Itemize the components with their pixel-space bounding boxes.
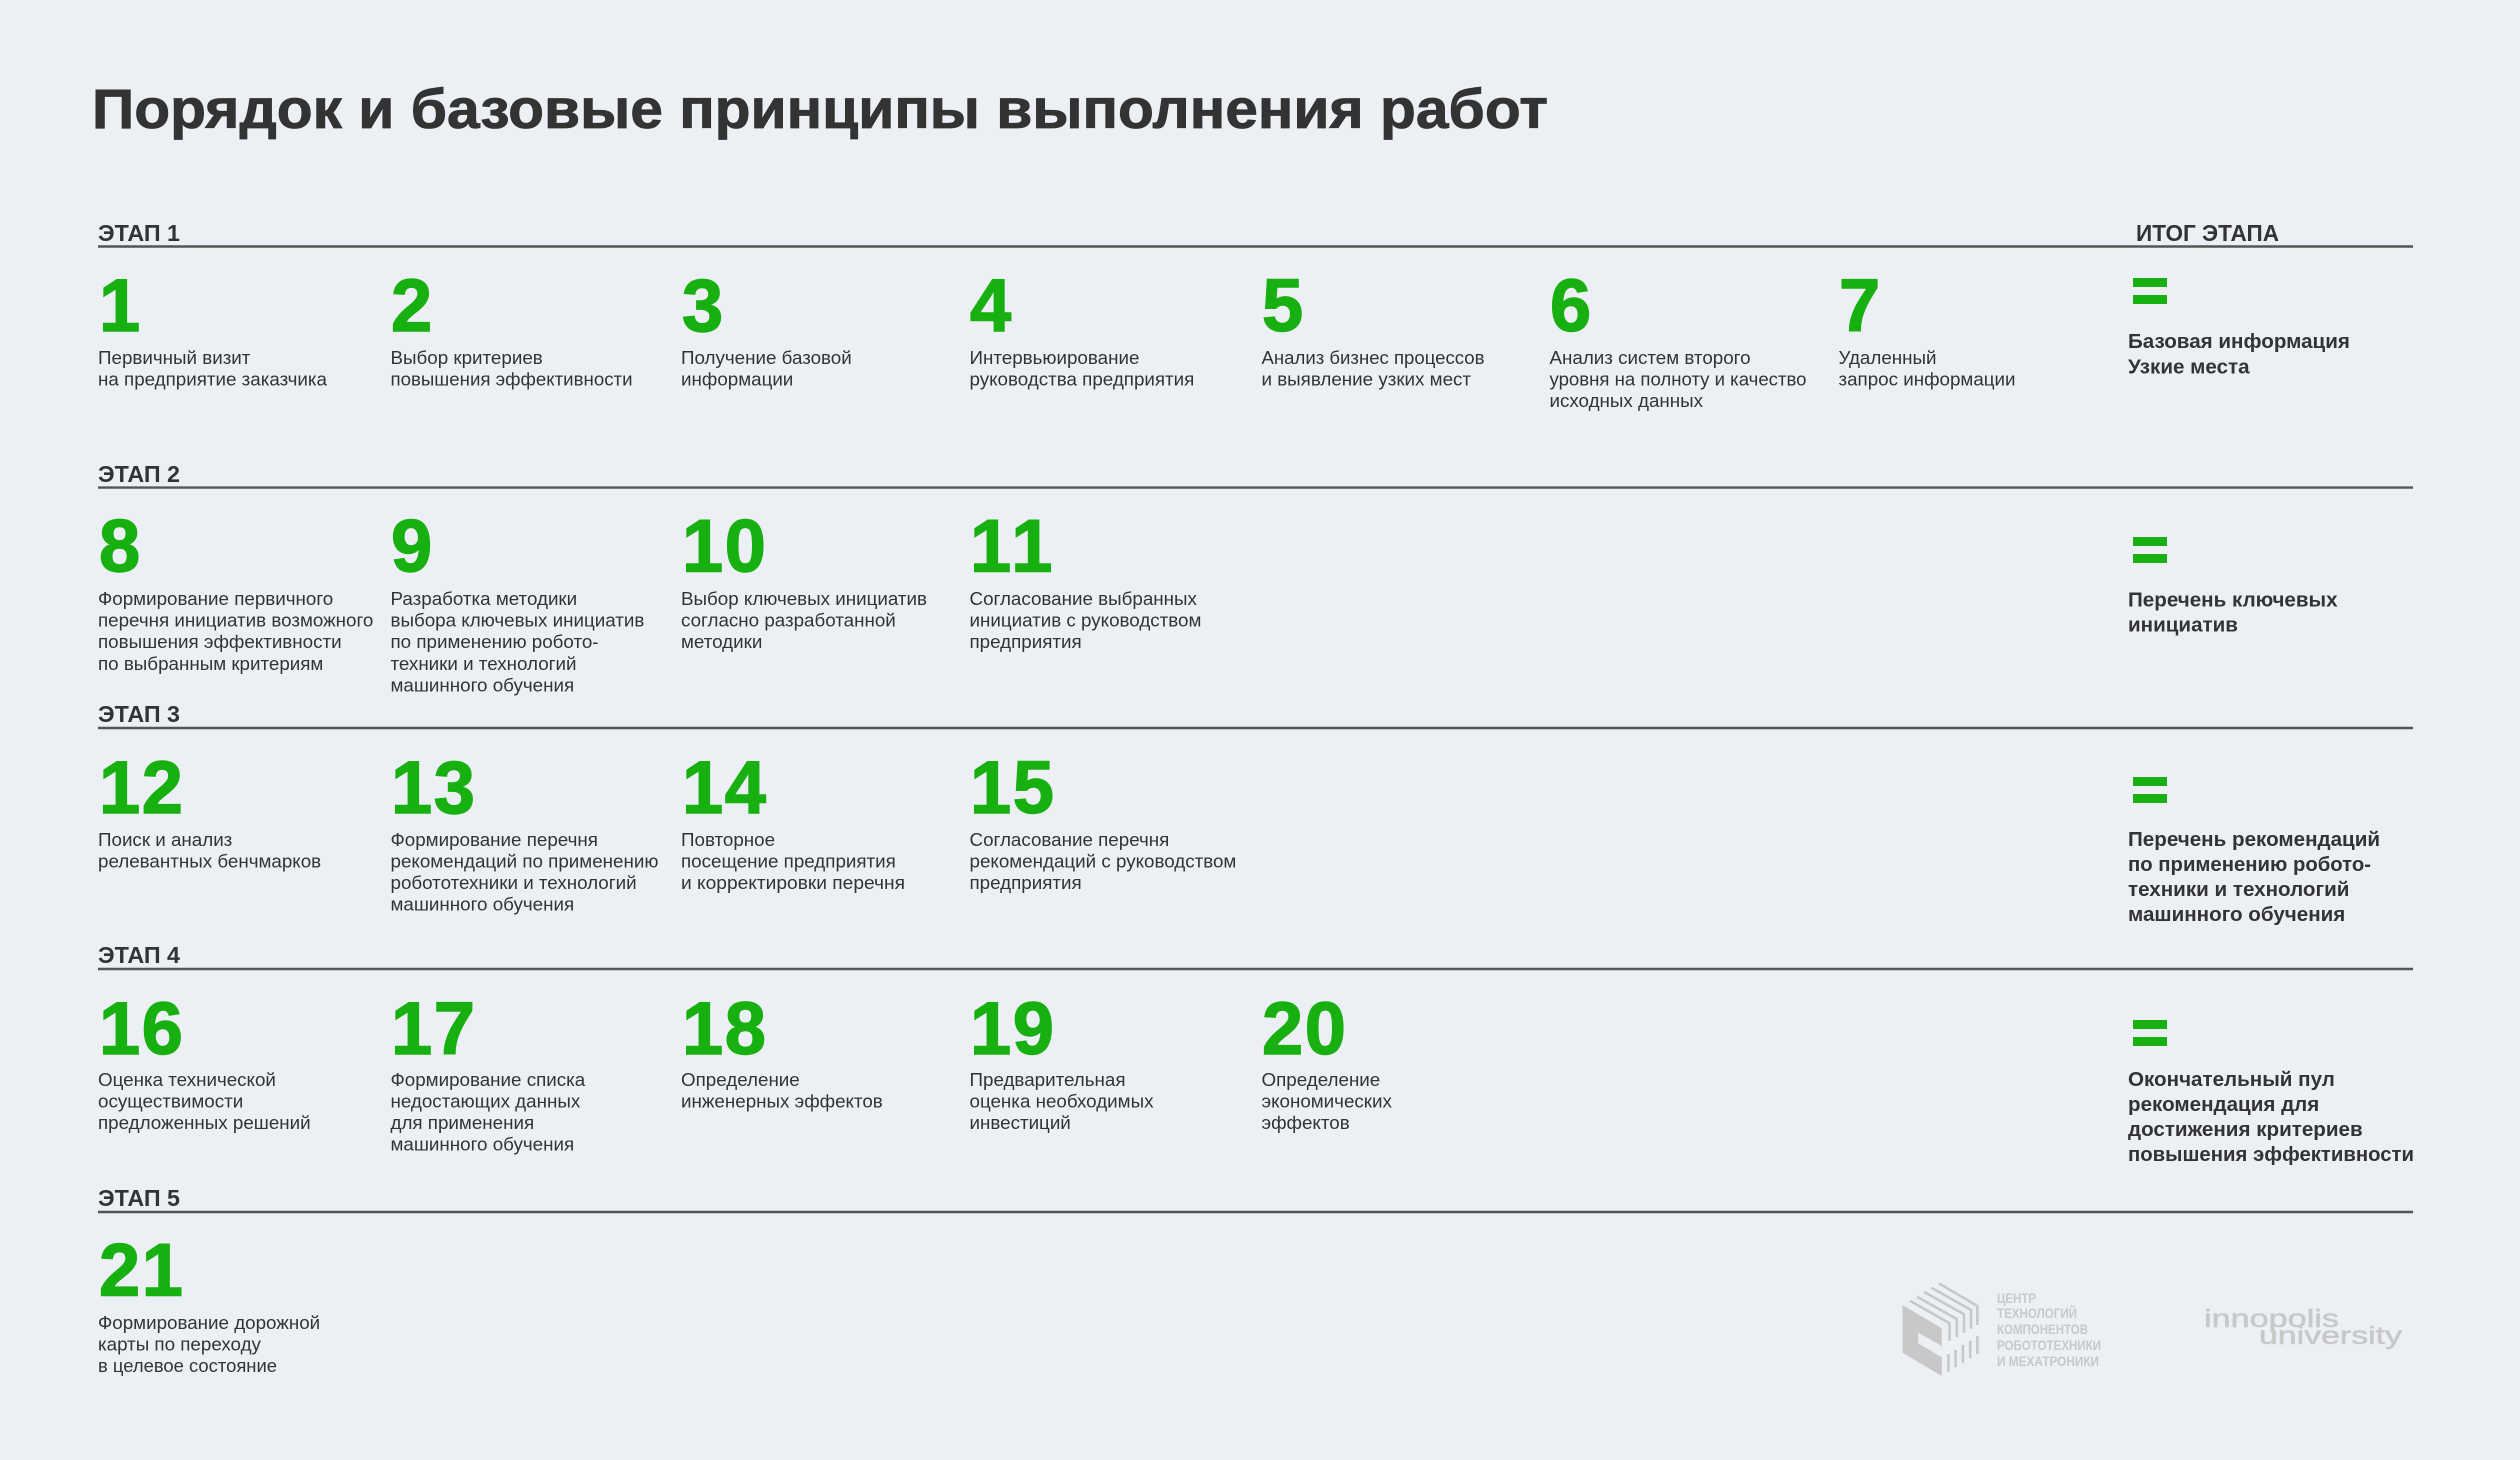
step 18	[681, 987, 883, 1112]
step 9	[390, 504, 644, 695]
step 19	[970, 987, 1154, 1133]
step 12: 12	[99, 746, 185, 829]
step 16: 16	[99, 987, 185, 1070]
step 21: карты по переходу	[98, 1334, 262, 1354]
result 4: повышения эффективности	[2128, 1143, 2414, 1166]
step 5: и выявление узких мест	[1262, 368, 1471, 390]
step 19: инвестиций	[970, 1112, 1071, 1133]
result 4: рекомендация для	[2128, 1093, 2319, 1116]
step 19: 19	[970, 987, 1056, 1070]
step 13: 13	[391, 746, 477, 829]
step 4: руководства предприятия	[970, 368, 1194, 390]
panel: stage 5	[98, 1185, 2413, 1376]
step 15: Согласование перечня	[970, 829, 1169, 850]
step 12	[98, 746, 321, 872]
step 5	[1262, 264, 1485, 390]
step 15: предприятия	[970, 872, 1082, 893]
result 1: Базовая информация	[2128, 330, 2350, 353]
step 8: по выбранным критериям	[98, 653, 323, 674]
panel: stage 3	[98, 701, 2413, 926]
step 21: Формирование дорожной	[98, 1312, 320, 1333]
result 3: по применению робото-	[2128, 853, 2371, 876]
step 1	[98, 264, 327, 390]
step 9: техники и технологий	[390, 653, 576, 674]
step 9: 9	[391, 504, 434, 588]
step 17: 17	[391, 987, 477, 1070]
logo: innopolis university	[2204, 1305, 2403, 1350]
result 3: техники и технологий	[2128, 878, 2349, 901]
step 6: 6	[1550, 264, 1593, 347]
step 2: повышения эффективности	[390, 368, 632, 390]
step 12: релевантных бенчмарков	[98, 850, 321, 872]
step 13: Формирование перечня	[390, 829, 598, 850]
result 3: Перечень рекомендаций	[2128, 828, 2380, 851]
step 14: Повторное	[681, 829, 775, 850]
heading: stage 3: ЭТАП 3	[98, 701, 180, 727]
step 20: Определение	[1262, 1069, 1380, 1090]
step 16	[98, 987, 311, 1133]
step 20: экономических	[1262, 1090, 1393, 1112]
step 7: 7	[1839, 264, 1882, 347]
step 13: робототехники и технологий	[390, 872, 637, 893]
logo text: ТЕХНОЛОГИЙ	[1997, 1306, 2077, 1321]
step 20	[1262, 987, 1393, 1133]
step 10	[681, 504, 927, 652]
step 8: 8	[99, 504, 142, 588]
logo text	[1997, 1291, 2101, 1369]
step 17: машинного обучения	[390, 1134, 574, 1154]
logo text: ЦЕНТР	[1997, 1291, 2036, 1306]
step 3	[681, 264, 852, 390]
heading: stage 4: ЭТАП 4	[98, 942, 180, 968]
step 2	[390, 264, 632, 390]
heading: stage 5: ЭТАП 5	[98, 1185, 180, 1211]
step 18: инженерных эффектов	[681, 1090, 883, 1112]
step 9: Разработка методики	[390, 588, 577, 609]
step 9: по применению робото-	[390, 631, 599, 652]
step 17	[390, 987, 586, 1154]
step 18: Определение	[681, 1069, 800, 1090]
step 13: машинного обучения	[390, 894, 574, 914]
logo: innopolis university: university	[2259, 1322, 2403, 1350]
step 15: 15	[970, 746, 1056, 829]
step 7: Удаленный	[1838, 347, 1937, 368]
step 7: запрос информации	[1838, 368, 2016, 390]
result 2	[2128, 537, 2338, 636]
step 10: 10	[682, 504, 768, 588]
step 14	[681, 746, 905, 893]
result 4: достижения критериев	[2128, 1118, 2363, 1141]
step 6: исходных данных	[1550, 390, 1704, 411]
step 21: в целевое состояние	[98, 1355, 277, 1376]
step 8: Формирование первичного	[98, 588, 333, 609]
step 1: 1	[99, 264, 142, 347]
step 10: Выбор ключевых инициатив	[681, 588, 927, 609]
result 4: Окончательный пул	[2128, 1068, 2335, 1091]
step 19: оценка необходимых	[970, 1090, 1154, 1112]
logo: robotics center	[1902, 1283, 2101, 1376]
step 8	[98, 504, 373, 674]
step 19: Предварительная	[970, 1069, 1126, 1090]
step 21: 21	[99, 1228, 185, 1312]
step 17: Формирование списка	[390, 1069, 586, 1090]
step 8: перечня инициатив возможного	[98, 610, 373, 631]
step 13	[390, 746, 658, 914]
step 3: 3	[682, 264, 725, 347]
step 11: 11	[970, 504, 1054, 588]
result 3	[2128, 777, 2380, 926]
panel: stage 4	[98, 942, 2414, 1166]
step 4: 4	[970, 264, 1013, 347]
heading: stage 1: ЭТАП 1	[98, 220, 180, 246]
step 6	[1550, 264, 1806, 411]
panel: stage 1	[98, 220, 2413, 411]
step 11: инициатив с руководством	[970, 610, 1201, 631]
heading: stage 2: ЭТАП 2	[98, 461, 180, 487]
step 21	[98, 1228, 320, 1376]
step 16: осуществимости	[98, 1090, 243, 1112]
step 11: предприятия	[970, 631, 1082, 652]
logo: innopolis university: innopolis	[2204, 1305, 2339, 1333]
step 20: эффектов	[1262, 1112, 1350, 1133]
step 3: информации	[681, 368, 793, 390]
step 15	[970, 746, 1236, 893]
step 15: рекомендаций с руководством	[970, 850, 1236, 872]
logo text: КОМПОНЕНТОВ	[1997, 1322, 2088, 1337]
step 10: согласно разработанной	[681, 610, 896, 631]
heading: stage result: ИТОГ ЭТАПА	[2136, 220, 2279, 246]
step 13: рекомендаций по применению	[390, 850, 658, 872]
result 1	[2128, 278, 2350, 378]
step 17: недостающих данных	[390, 1090, 581, 1112]
step 20: 20	[1262, 987, 1348, 1070]
step 14: посещение предприятия	[681, 850, 896, 872]
step 17: для применения	[390, 1112, 534, 1133]
step 3: Получение базовой	[681, 347, 852, 368]
step 16: предложенных решений	[98, 1112, 311, 1133]
step 6: Анализ систем второго	[1550, 347, 1751, 368]
title: Порядок и базовые принципы выполнения работ	[92, 77, 1548, 140]
step 9: выбора ключевых инициатив	[390, 610, 644, 631]
result 3: машинного обучения	[2128, 903, 2345, 926]
step 2: Выбор критериев	[390, 347, 543, 368]
step 5: Анализ бизнес процессов	[1262, 347, 1485, 368]
result 2: инициатив	[2128, 614, 2238, 636]
result 1: Узкие места	[2128, 356, 2250, 378]
step 6: уровня на полноту и качество	[1550, 368, 1806, 390]
step 14: и корректировки перечня	[681, 872, 905, 893]
result 2: Перечень ключевых	[2128, 588, 2338, 612]
step 14: 14	[682, 746, 768, 829]
step 7	[1838, 264, 2016, 390]
logo text: И МЕХАТРОНИКИ	[1997, 1354, 2099, 1369]
icon: cube	[1902, 1283, 1977, 1376]
step 18: 18	[682, 987, 768, 1070]
step 1: Первичный визит	[98, 347, 251, 368]
step 10: методики	[681, 631, 762, 652]
step 2: 2	[391, 264, 434, 347]
step 1: на предприятие заказчика	[98, 368, 327, 390]
step 4	[970, 264, 1194, 390]
panel: stage 2	[98, 461, 2413, 695]
step 12: Поиск и анализ	[98, 829, 232, 850]
step 11: Согласование выбранных	[970, 588, 1198, 609]
step 4: Интервьюирование	[970, 347, 1139, 368]
logo text: РОБОТОТЕХНИКИ	[1997, 1338, 2101, 1353]
result 4	[2128, 1020, 2414, 1166]
step 9: машинного обучения	[390, 674, 574, 695]
step 8: повышения эффективности	[98, 631, 342, 652]
step 5: 5	[1262, 264, 1305, 347]
step 11	[970, 504, 1201, 652]
step 16: Оценка технической	[98, 1069, 276, 1090]
